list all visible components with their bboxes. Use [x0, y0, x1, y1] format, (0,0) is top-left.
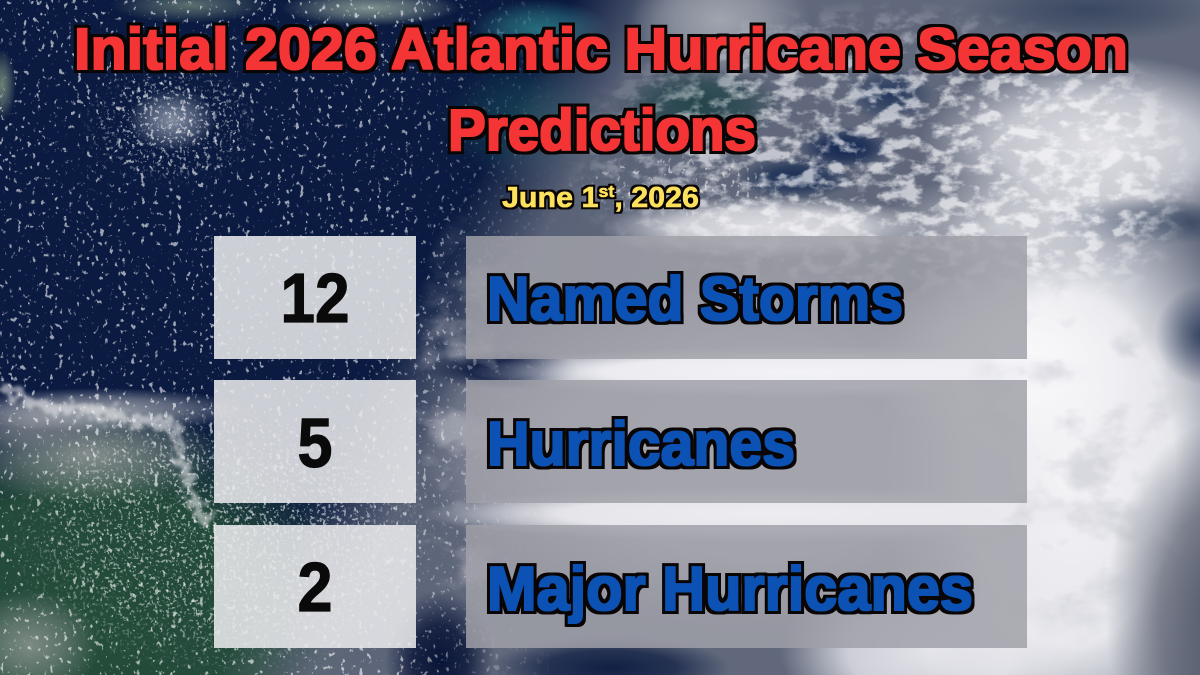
- count panel: 12: 12: [280, 259, 350, 337]
- label panel: Major Hurricanes: Major Hurricanes: [487, 555, 973, 624]
- label panel: Hurricanes: Hurricanes: [487, 410, 795, 479]
- row: major hurricanes: [214, 525, 1027, 648]
- row: named storms: [214, 236, 1027, 359]
- title: Predictions: [448, 98, 756, 163]
- title: Initial 2026 Atlantic Hurricane Season: [74, 17, 1128, 82]
- count panel: 5: 5: [298, 404, 332, 482]
- count panel: 12: [214, 236, 416, 359]
- date subtitle: June 1: [502, 182, 594, 214]
- date subtitle: , 2026: [614, 182, 699, 214]
- row: hurricanes: [214, 380, 1027, 503]
- count panel: 2: [214, 525, 416, 648]
- label panel: Named Storms: Named Storms: [487, 265, 903, 334]
- label panel: Named Storms: [466, 236, 1027, 359]
- title: [74, 17, 1128, 163]
- count panel: 5: [214, 380, 416, 503]
- date subtitle: st: [598, 182, 615, 201]
- label panel: Major Hurricanes: [466, 525, 1027, 648]
- label panel: Hurricanes: [466, 380, 1027, 503]
- count panel: 2: 2: [298, 548, 332, 626]
